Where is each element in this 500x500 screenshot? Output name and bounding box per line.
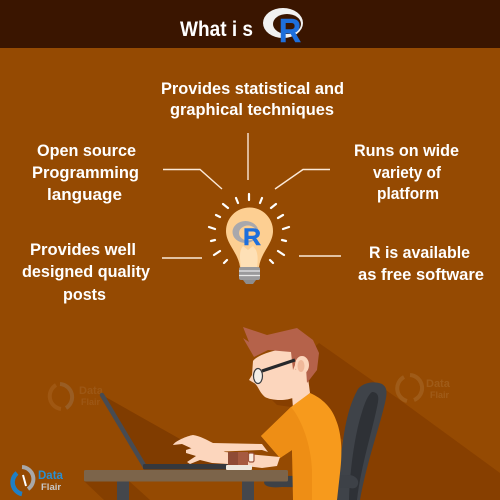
- hair: [243, 327, 319, 383]
- icon: R logo: [263, 8, 303, 49]
- neck: [290, 370, 310, 408]
- text: open source: language: [47, 186, 122, 204]
- header banner: [0, 0, 500, 49]
- icon: light bulb: [209, 194, 289, 284]
- text: runs on wide variety: variety of: [373, 164, 441, 182]
- text: statistical techniques: [161, 80, 344, 119]
- long shadow of person: [265, 343, 500, 500]
- arms and hands: [173, 435, 280, 468]
- text: free software: [358, 244, 484, 284]
- laptop: [102, 395, 228, 470]
- person: [173, 327, 341, 500]
- watermark left: Flair: [81, 397, 101, 407]
- bulb R logo: R: [243, 224, 261, 251]
- watermark right: Data: [426, 378, 451, 390]
- long shadow of laptop: [102, 395, 235, 470]
- DataFlair logo: [13, 467, 64, 494]
- watermark right: Flair: [430, 390, 450, 400]
- text: statistical techniques: graphical techniques: [170, 101, 334, 119]
- shirt: [261, 393, 341, 500]
- bulb rays: [209, 194, 289, 263]
- text: runs on wide variety: Runs on wide: [354, 142, 459, 160]
- watermark right: [397, 375, 451, 401]
- connector lines: [162, 133, 341, 258]
- chair: [264, 382, 387, 500]
- text: quality posts: Provides well: [30, 241, 136, 259]
- text: open source: Open source: [37, 142, 136, 160]
- icon: R logo: R: [279, 12, 301, 49]
- desk: [84, 470, 288, 500]
- DataFlair logo: Flair: [41, 482, 61, 493]
- text: open source: [32, 142, 139, 204]
- text: runs on wide variety: [354, 142, 459, 203]
- text: free software: as free software: [358, 266, 484, 284]
- text: runs on wide variety: platform: [377, 185, 439, 203]
- coffee cup: [226, 452, 254, 470]
- ear: [295, 356, 309, 374]
- text: quality posts: designed quality: [22, 263, 151, 281]
- glasses: [254, 360, 295, 384]
- watermark left: Data: [79, 385, 104, 397]
- bulb glass: [226, 208, 273, 267]
- DataFlair logo: Data: [38, 470, 64, 482]
- header title: What i s: [180, 18, 253, 41]
- text: quality posts: [22, 241, 151, 304]
- watermark left: [50, 384, 104, 409]
- text: quality posts: posts: [63, 286, 106, 304]
- text: open source: Programming: [32, 164, 139, 182]
- long shadow of desk: [84, 481, 150, 500]
- bulb base: [239, 267, 260, 284]
- face: [249, 348, 296, 400]
- text: statistical techniques: Provides statistical and: [161, 80, 344, 98]
- text: free software: R is available: [369, 244, 470, 262]
